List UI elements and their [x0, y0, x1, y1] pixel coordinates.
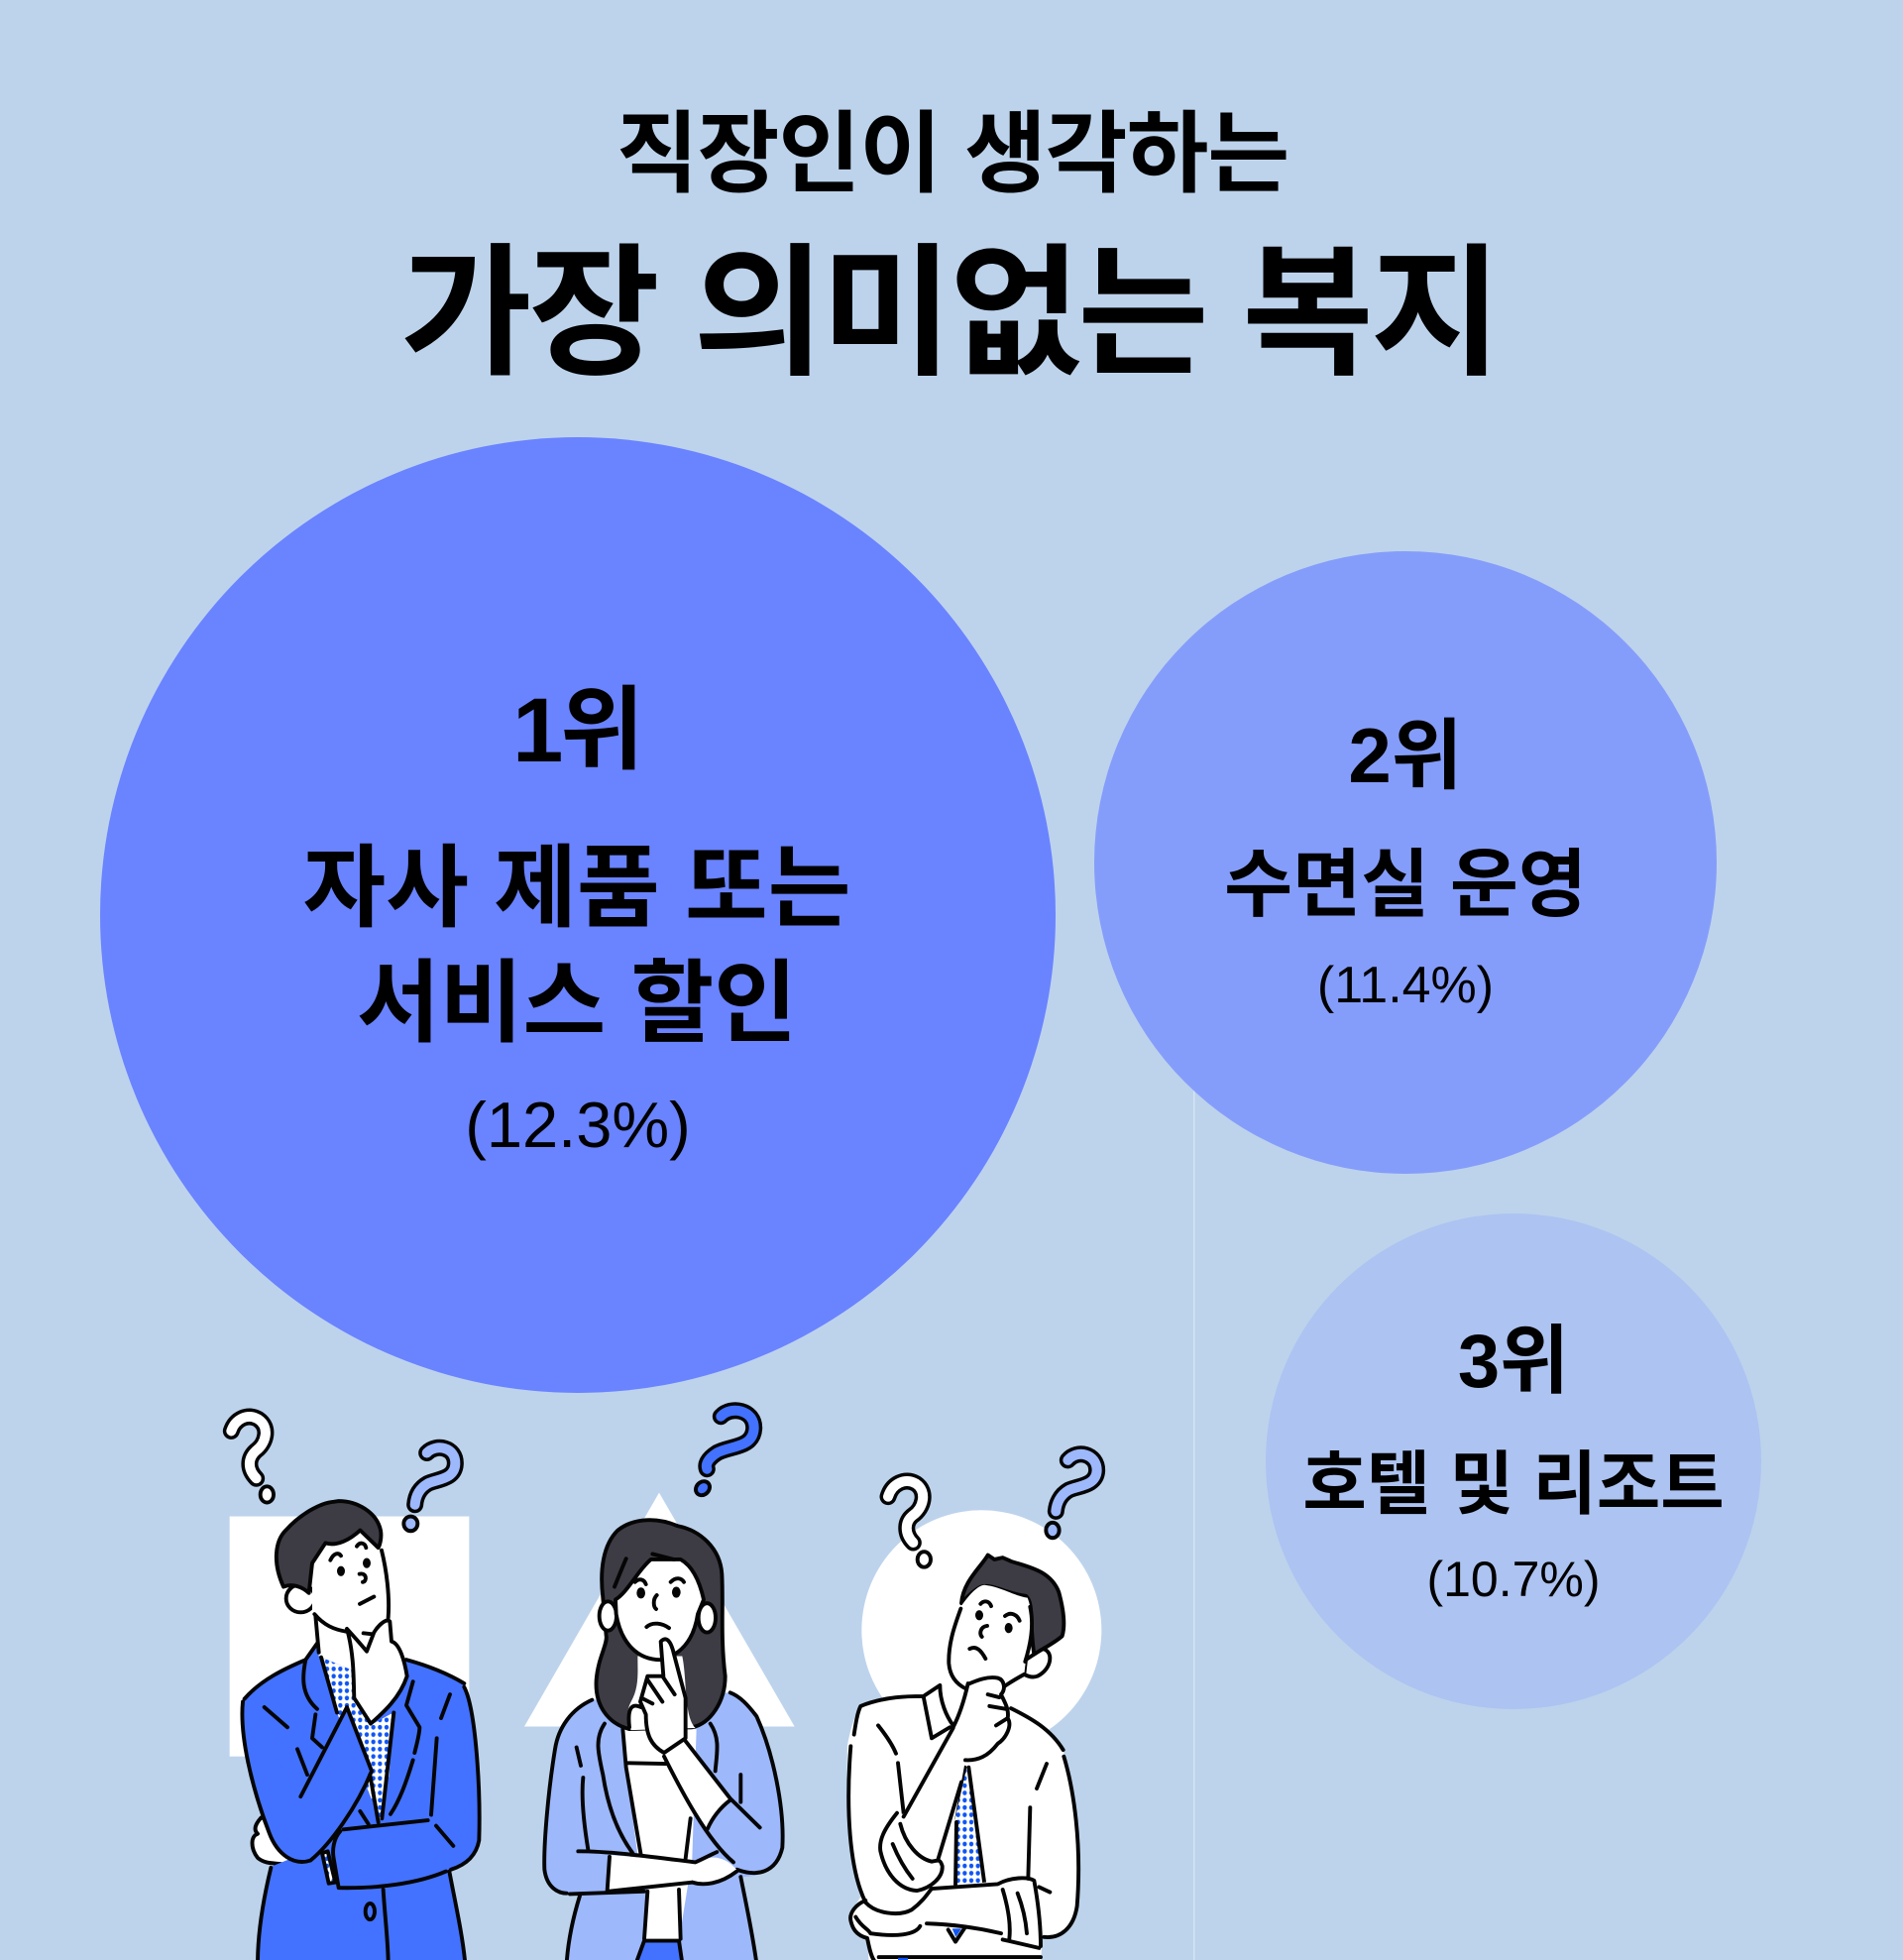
face — [312, 1531, 389, 1634]
shirt — [321, 1658, 393, 1820]
face — [949, 1585, 1031, 1689]
rank 1 percentage: (12.3%) — [465, 1089, 691, 1161]
shirt body — [847, 1685, 1078, 1960]
illustration: woman in light blue jacket — [524, 1411, 795, 1960]
question mark light blue — [403, 1447, 455, 1531]
rolled sleeve — [880, 1813, 943, 1891]
blue skirt — [636, 1941, 682, 1960]
jacket lines — [245, 1644, 480, 1960]
question mark blue — [694, 1411, 754, 1498]
raised arm — [664, 1741, 760, 1862]
white square backdrop — [230, 1517, 469, 1757]
rank 1 name: 자사 제품 또는 — [303, 839, 850, 939]
ear — [1024, 1649, 1050, 1676]
rank 3 label: 3위 — [1458, 1320, 1569, 1404]
top lines — [577, 1724, 740, 1939]
question mark white — [888, 1481, 931, 1567]
illustration: man in white shirt — [847, 1454, 1101, 1960]
illustration: man in blue suit — [230, 1417, 480, 1960]
tie bottom — [898, 1958, 908, 1960]
white top — [623, 1729, 697, 1941]
jacket outline — [544, 1692, 783, 1960]
white circle backdrop — [861, 1510, 1101, 1750]
face line — [314, 1551, 389, 1653]
neck — [314, 1612, 374, 1671]
ears — [600, 1601, 616, 1631]
shirt cuff — [322, 1851, 335, 1884]
lower arm — [850, 1879, 1043, 1946]
tie — [953, 1766, 984, 1884]
vertical divider line — [1193, 1083, 1195, 1960]
hair details — [615, 1554, 674, 1727]
raised arm and sleeve — [880, 1679, 1008, 1890]
white triangle backdrop — [524, 1493, 795, 1727]
lower forearm — [608, 1855, 736, 1892]
hand — [640, 1639, 686, 1753]
rank 1 label: 1위 — [512, 680, 641, 781]
back hand — [252, 1818, 321, 1868]
neck — [627, 1656, 696, 1730]
jacket — [544, 1692, 783, 1960]
eyes, nose, mouth — [969, 1601, 1020, 1659]
rank 2 label: 2위 — [1348, 712, 1463, 799]
face — [616, 1559, 704, 1660]
hair — [961, 1556, 1063, 1655]
ear — [286, 1584, 315, 1612]
raised arm — [242, 1701, 372, 1862]
rank 2 percentage: (11.4%) — [1317, 957, 1494, 1014]
title line 2: 가장 의미없는 복지 — [400, 234, 1499, 394]
jacket body — [242, 1644, 480, 1960]
eyes, nose, mouth — [635, 1578, 684, 1628]
title line 1: 직장인이 생각하는 — [616, 105, 1288, 204]
panel: rank 3 circle — [1266, 1213, 1761, 1709]
eyes, nose, mouth — [330, 1544, 374, 1604]
title — [400, 105, 1499, 394]
hair — [597, 1520, 726, 1729]
tie tip — [952, 1928, 961, 1937]
hand — [347, 1621, 407, 1724]
panel: rank 2 circle — [1094, 551, 1717, 1174]
shirt outline — [848, 1685, 1078, 1937]
question mark light blue — [1046, 1454, 1097, 1538]
rank 2 name: 수면실 운영 — [1224, 843, 1587, 926]
panel: rank 1 circle: 서비스 할인 — [357, 954, 797, 1054]
button — [366, 1903, 375, 1919]
question mark white — [231, 1417, 274, 1503]
rank 3 name: 호텔 및 리조트 — [1302, 1445, 1725, 1523]
rank 3 percentage: (10.7%) — [1426, 1552, 1601, 1607]
panel: rank 1 circle — [100, 437, 1056, 1393]
hair — [277, 1501, 381, 1593]
